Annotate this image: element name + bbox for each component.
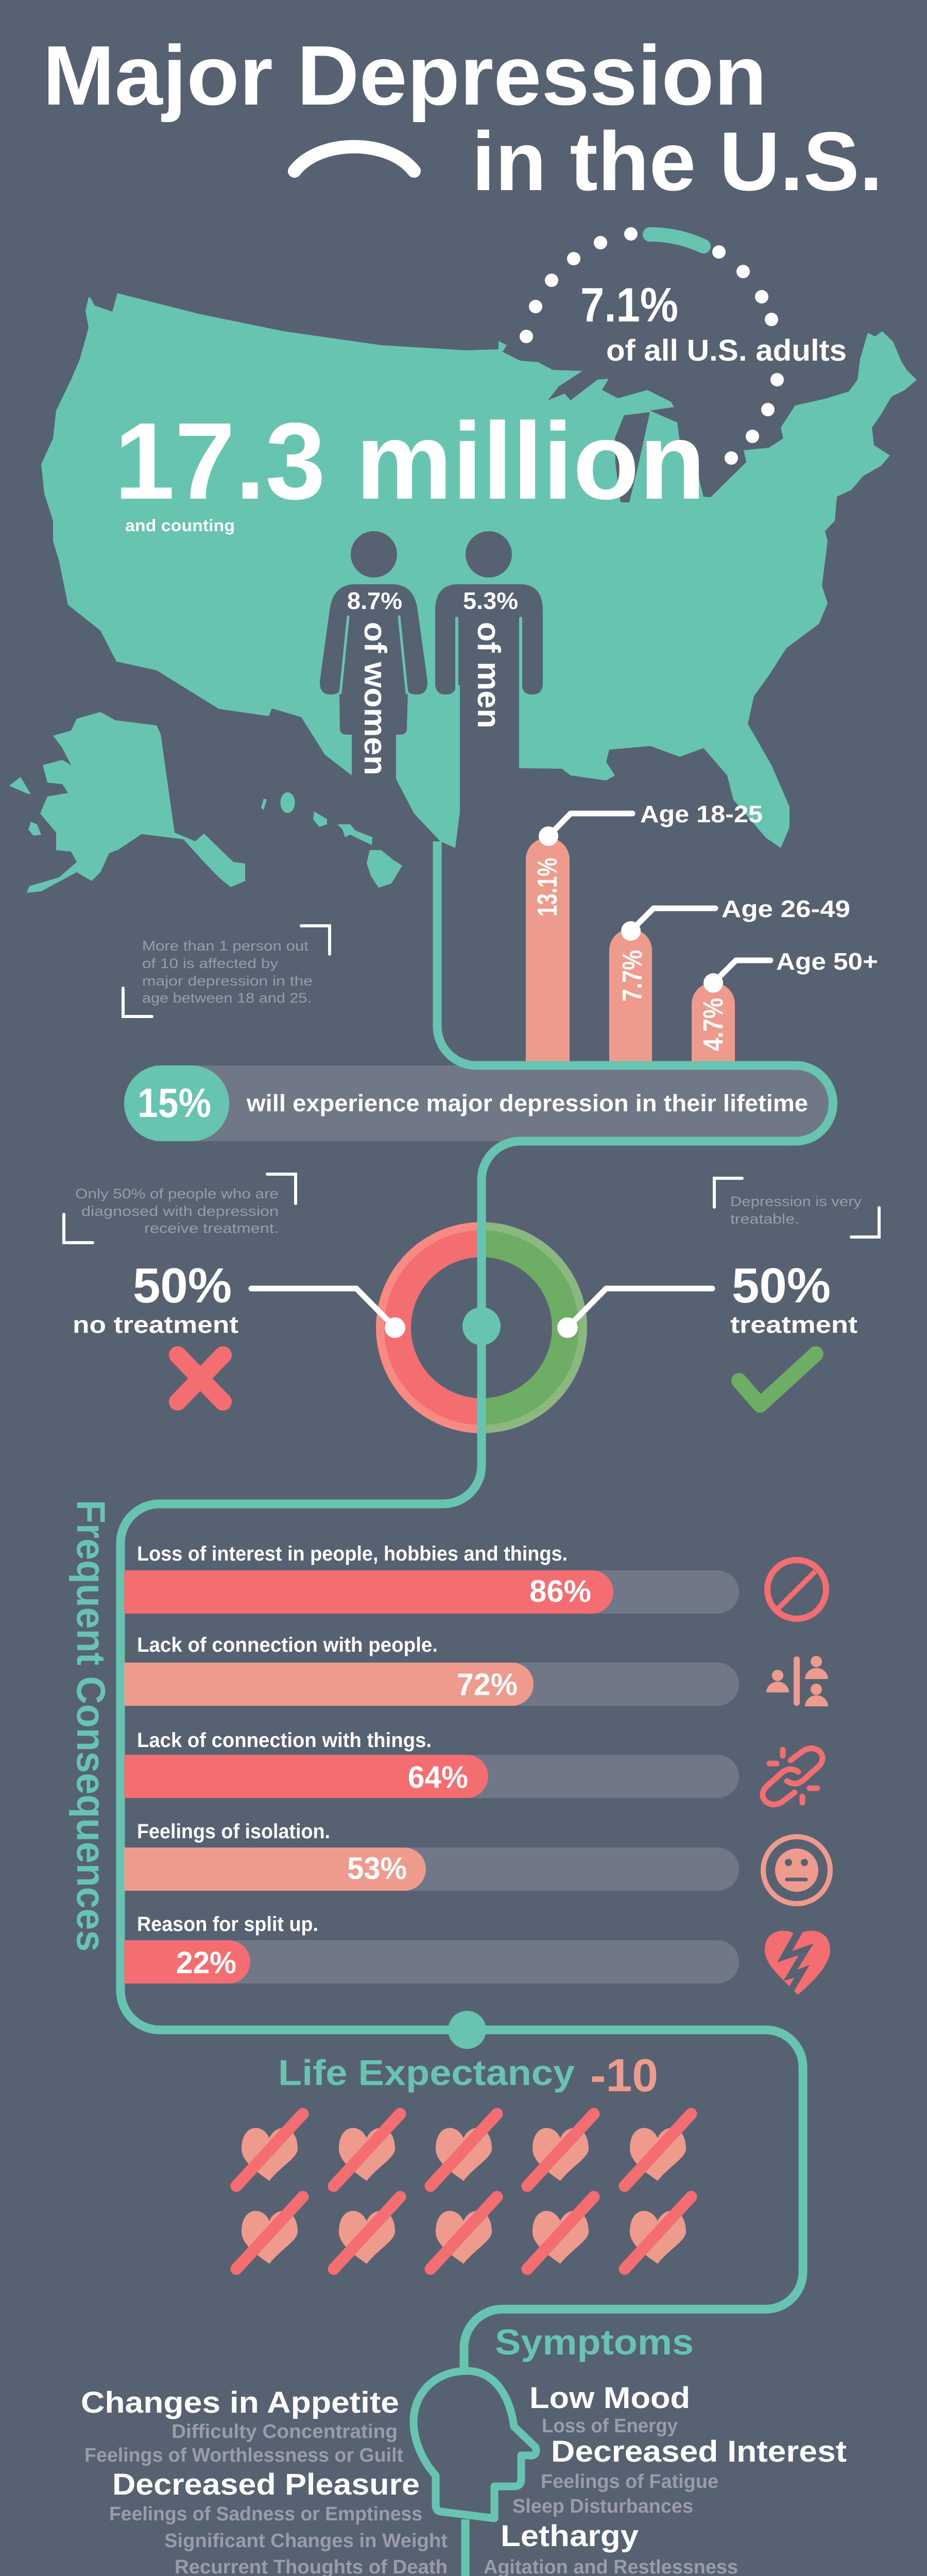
bar: split up: Reason for split up. <box>137 1913 318 1936</box>
icon: separated people <box>766 1656 828 1706</box>
bar: connection with things <box>124 1729 739 1798</box>
stat: 7.1 percent: of all U.S. adults <box>606 334 847 367</box>
treatment stem <box>461 2519 470 2576</box>
heading: symptoms: Symptoms <box>495 2322 694 2362</box>
hearts grid <box>236 2114 691 2269</box>
title: in the U.S. <box>472 115 883 208</box>
map of the United States <box>9 293 917 893</box>
symptoms list left: Changes in Appetite <box>81 2386 399 2419</box>
callout: treatment: 50% <box>732 1258 831 1313</box>
lake michigan <box>615 412 650 502</box>
note: only 50 percent: diagnosed with depression <box>81 1204 279 1219</box>
heading: life expectancy: -10 <box>590 2050 658 2102</box>
callout: no treatment: no treatment <box>73 1311 238 1338</box>
icon: broken heart <box>765 1931 830 1995</box>
title: Major Depression <box>43 28 767 123</box>
heading: frequent consequences: Frequent Consequences <box>68 1500 114 1952</box>
progress arc <box>650 234 703 246</box>
age bar chart <box>526 801 878 1062</box>
bar: connection with people <box>124 1634 739 1706</box>
note: age 18 to 25: More than 1 person out <box>142 938 309 954</box>
symptoms list left <box>81 2386 448 2576</box>
note: only 50 percent: receive treatment. <box>144 1221 279 1236</box>
bar: feelings of isolation: 53% <box>347 1851 407 1886</box>
symptoms list left: Decreased Pleasure <box>112 2468 420 2501</box>
symptoms list right: Decreased Interest <box>551 2435 847 2468</box>
age bar chart: 13.1% <box>532 858 563 917</box>
bar: connection with people: Lack of connection with people. <box>137 1634 438 1656</box>
icon: broken chain <box>763 1748 822 1805</box>
node: life expectancy <box>448 2011 486 2049</box>
callout: treatment <box>557 1258 857 1338</box>
icon: ban <box>767 1560 826 1619</box>
figure: woman: 8.7% <box>347 587 402 614</box>
connector line <box>121 841 833 2370</box>
note: only 50 percent <box>64 1174 296 1243</box>
note: very treatable <box>714 1178 879 1237</box>
symptoms list left: Feelings of Sadness or Emptiness <box>109 2503 422 2525</box>
icon: head outline <box>414 2371 536 2518</box>
figure: man: of men <box>471 622 506 728</box>
note: age 18 to 25: of 10 is affected by <box>142 956 279 971</box>
icon: cross <box>178 1355 223 1402</box>
symptoms list right <box>484 2381 847 2576</box>
bar: feelings of isolation: Feelings of isolation. <box>137 1820 330 1843</box>
age bar chart: 4.7% <box>698 998 729 1051</box>
note: age 18 to 25: age between 18 and 25. <box>142 990 312 1006</box>
bar: feelings of isolation <box>124 1820 739 1891</box>
note: age 18 to 25: major depression in the <box>142 973 313 989</box>
icon: frown <box>295 147 414 171</box>
age bar chart: Age 50+ <box>776 948 878 975</box>
figure: woman <box>320 531 427 784</box>
symptoms list right: Sleep Disturbances <box>512 2496 693 2517</box>
bar: connection with people: 72% <box>457 1667 518 1702</box>
figure: woman: of women <box>358 622 392 775</box>
bar: loss of interest: Loss of interest in people, hobbies and things. <box>137 1543 568 1565</box>
lifetime bar: will experience major depression in their lifetime <box>246 1090 808 1116</box>
note: very treatable: treatable. <box>730 1211 799 1227</box>
aleutian islands <box>9 777 41 836</box>
bar: loss of interest: 86% <box>529 1574 591 1608</box>
symptoms list right: Loss of Energy <box>542 2415 678 2437</box>
symptoms list right: Feelings of Fatigue <box>541 2471 718 2493</box>
bar: split up <box>124 1913 739 1984</box>
stat: 17.3 million: and counting <box>125 516 235 535</box>
age bar chart: Age 26-49 <box>722 895 850 922</box>
age bar chart: 7.7% <box>617 950 648 1002</box>
symptoms list left: Feelings of Worthlessness or Guilt <box>84 2445 403 2466</box>
symptoms list right: Low Mood <box>529 2381 690 2415</box>
figure: man: 5.3% <box>463 587 518 614</box>
stat: 7.1 percent <box>580 278 847 367</box>
hawaii <box>261 792 402 888</box>
icon: check <box>739 1354 816 1405</box>
symptoms list left: Significant Changes in Weight <box>164 2530 448 2552</box>
title <box>43 28 883 208</box>
bar: split up: 22% <box>176 1945 236 1980</box>
heading: life expectancy: Life Expectancy <box>278 2053 575 2093</box>
bar: connection with things: Lack of connection with things. <box>137 1729 432 1752</box>
symptoms list right: Lethargy <box>501 2519 639 2553</box>
bar: loss of interest <box>124 1543 739 1614</box>
figure: man <box>435 531 543 845</box>
callout: treatment: treatment <box>730 1311 857 1338</box>
note: age 18 to 25 <box>123 926 330 1016</box>
callout: no treatment <box>73 1258 405 1338</box>
note: very treatable: Depression is very <box>730 1194 862 1209</box>
node: donut center <box>462 1307 501 1345</box>
age bar chart: Age 18-25 <box>640 801 763 827</box>
callout: no treatment: 50% <box>133 1258 232 1313</box>
donut chart: treatment split <box>376 1222 587 1433</box>
icon: neutral face <box>763 1837 830 1904</box>
stat: 17.3 million: 17.3 million <box>114 400 706 522</box>
lifetime bar: 15% <box>138 1080 211 1126</box>
dotted progress circle <box>520 227 784 465</box>
alaska <box>27 712 245 893</box>
lifetime bar <box>124 1065 831 1141</box>
heading: life expectancy <box>278 2050 658 2102</box>
stat: 7.1 percent: 7.1% <box>580 278 678 332</box>
bar: connection with things: 64% <box>408 1760 468 1794</box>
note: only 50 percent: Only 50% of people who are <box>75 1186 279 1201</box>
symptoms list left: Difficulty Concentrating <box>171 2421 398 2443</box>
